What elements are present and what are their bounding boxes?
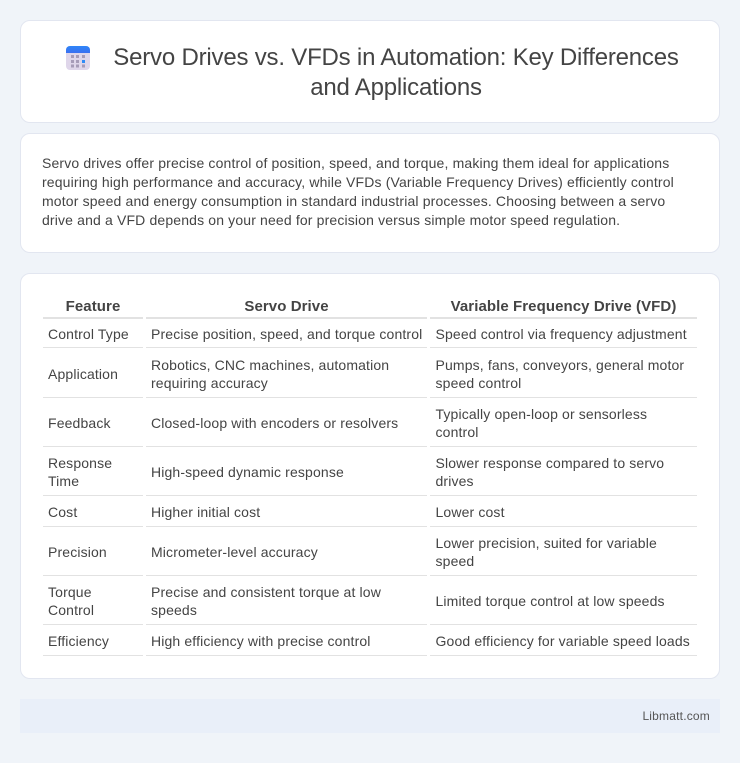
row: torque control: Precise and consistent torque at low bbox=[151, 584, 381, 600]
row: feedback: Typically open-loop or sensorless bbox=[436, 406, 647, 422]
row: control type: Control Type bbox=[48, 326, 129, 342]
row: cost: Lower cost bbox=[436, 504, 505, 520]
row: precision: Precision bbox=[48, 544, 107, 560]
row: response time: drives bbox=[436, 473, 474, 489]
summary text: requiring high performance and accuracy, while VFDs (Variable Frequency Drives) efficiently control bbox=[42, 174, 674, 190]
panel: comparison table bbox=[20, 273, 720, 679]
row: torque control: speeds bbox=[151, 602, 197, 618]
footer bar bbox=[20, 699, 720, 733]
row: efficiency bbox=[43, 633, 697, 656]
row: efficiency: Good efficiency for variable speed loads bbox=[436, 633, 690, 649]
row: cost bbox=[43, 504, 697, 527]
row: torque control: Limited torque control at low speeds bbox=[436, 593, 665, 609]
row: torque control: Control bbox=[48, 602, 94, 618]
row: response time: Slower response compared to servo bbox=[436, 455, 664, 471]
row: control type bbox=[43, 326, 697, 348]
row: precision: speed bbox=[436, 553, 474, 569]
row: application: speed control bbox=[436, 375, 521, 391]
table header: Variable Frequency Drive (VFD) bbox=[451, 298, 676, 315]
table header: Servo Drive bbox=[244, 298, 329, 315]
row: torque control bbox=[43, 584, 697, 625]
table header: Feature bbox=[66, 298, 120, 315]
row: control type: Precise position, speed, and torque control bbox=[151, 326, 422, 342]
row: response time: High-speed dynamic response bbox=[151, 464, 344, 480]
summary text: motor speed and energy consumption in standard industrial processes. Choosing between a servo bbox=[42, 193, 665, 209]
summary text: drive and a VFD depends on your need for precision versus simple motor speed regulation. bbox=[42, 212, 620, 228]
row: application: Robotics, CNC machines, automation bbox=[151, 357, 389, 373]
row: response time: Response bbox=[48, 455, 112, 471]
row: control type: Speed control via frequency adjustment bbox=[436, 326, 687, 342]
row: feedback: control bbox=[436, 424, 479, 440]
summary text bbox=[42, 155, 674, 228]
row: application bbox=[43, 357, 697, 398]
row: response time bbox=[43, 455, 697, 496]
row: application: Pumps, fans, conveyors, general motor bbox=[436, 357, 684, 373]
row: application: Application bbox=[48, 366, 118, 382]
title: and Applications bbox=[310, 74, 482, 101]
row: application: requiring accuracy bbox=[151, 375, 268, 391]
panel: header bbox=[20, 20, 720, 123]
title: Servo Drives vs. VFDs in Automation: Key Differences bbox=[113, 44, 679, 71]
row: cost: Higher initial cost bbox=[151, 504, 260, 520]
row: torque control: Torque bbox=[48, 584, 92, 600]
row: efficiency: High efficiency with precise control bbox=[151, 633, 371, 649]
summary text: Servo drives offer precise control of position, speed, and torque, making them ideal for applications bbox=[42, 155, 669, 171]
row: precision: Micrometer-level accuracy bbox=[151, 544, 318, 560]
table header bbox=[43, 298, 697, 319]
row: feedback bbox=[43, 406, 697, 447]
row: feedback: Feedback bbox=[48, 415, 111, 431]
row: efficiency: Efficiency bbox=[48, 633, 109, 649]
panel: summary bbox=[20, 133, 720, 253]
footer text: Libmatt.com bbox=[642, 709, 710, 723]
row: precision bbox=[43, 535, 697, 576]
row: feedback: Closed-loop with encoders or resolvers bbox=[151, 415, 398, 431]
icon: calendar bbox=[66, 46, 90, 70]
row: cost: Cost bbox=[48, 504, 77, 520]
row: precision: Lower precision, suited for variable bbox=[436, 535, 657, 551]
title bbox=[113, 44, 679, 101]
row: response time: Time bbox=[48, 473, 79, 489]
